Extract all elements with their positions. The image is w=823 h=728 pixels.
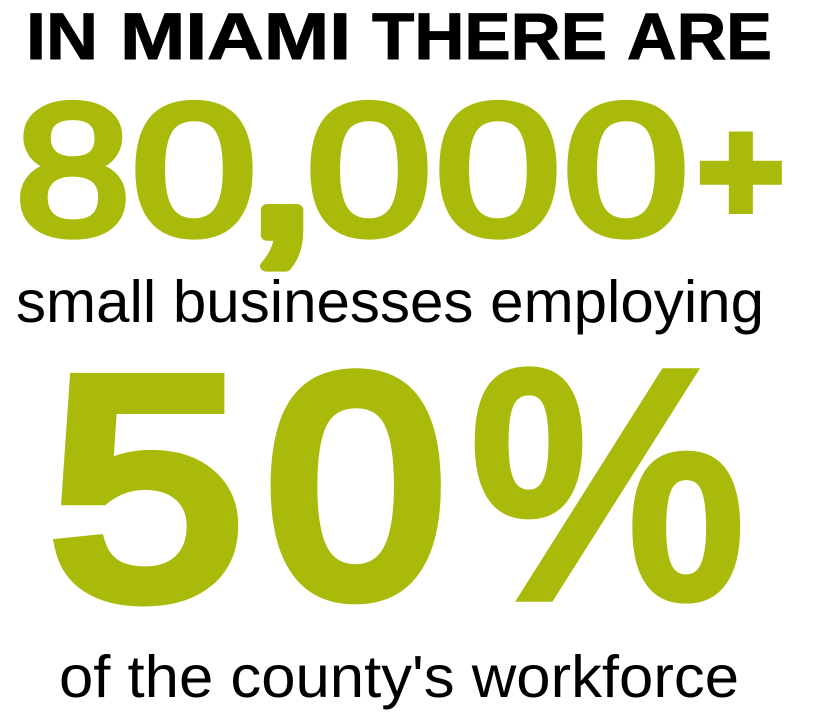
big number: 50% [51, 306, 745, 665]
heading: in Miami there are: THERE [372, 0, 607, 73]
text: of the county's workforce: of the county's workforce [59, 644, 739, 710]
big number: 80,000+ [16, 17, 782, 287]
big number: 80,000+: 000 [306, 65, 689, 273]
big number: 80,000+: 8 [16, 65, 130, 274]
big number: 50%: % [469, 306, 745, 665]
heading: in Miami there are [26, 0, 772, 73]
big number: 80,000+: , [240, 17, 324, 287]
heading: in Miami there are: ARE [627, 0, 772, 73]
big number: 80,000+: + [700, 92, 782, 249]
text: small businesses employing: small businesses employing [16, 269, 764, 335]
big number: 50%: 5 [51, 316, 243, 661]
heading: in Miami there are: MIAMI [120, 0, 351, 73]
big number: 50%: 0 [268, 314, 444, 658]
big number: 80,000+: 0 [131, 65, 257, 273]
heading: in Miami there are: IN [26, 0, 98, 73]
